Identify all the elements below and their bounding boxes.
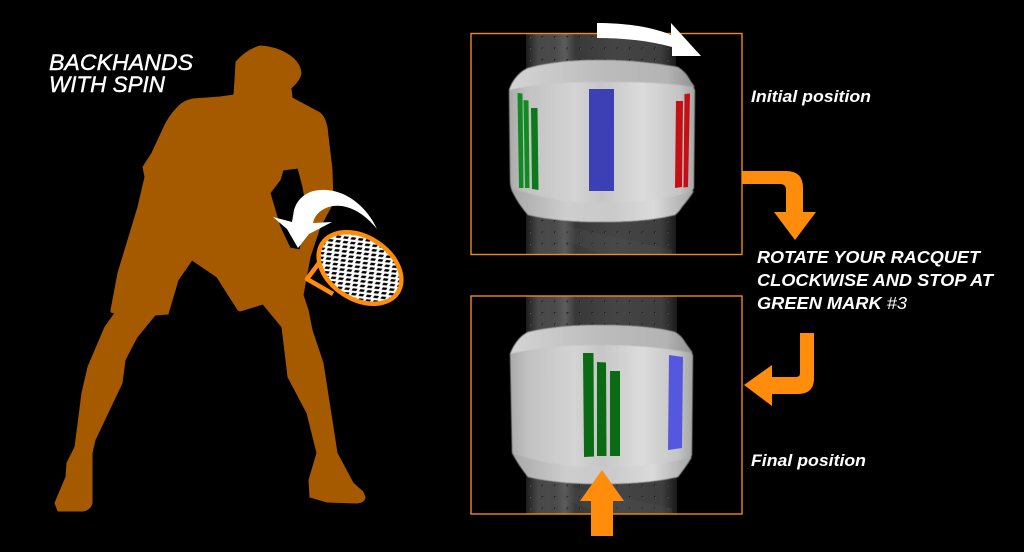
blue mark (589, 89, 614, 191)
title: BACKHANDS (49, 50, 193, 75)
panel: initial position (471, 33, 742, 255)
player silhouette (55, 46, 365, 511)
racquet grip (526, 33, 676, 255)
instruction text: CLOCKWISE AND STOP AT (757, 270, 994, 290)
instruction text: GREEN MARK #3 (757, 293, 907, 313)
arrow: to final position (744, 333, 814, 406)
green marks (583, 353, 620, 457)
grip collar (510, 325, 693, 484)
green marks (518, 93, 538, 190)
label: initial position: Initial position (751, 87, 871, 106)
arrow: up to marks (580, 470, 624, 536)
racquet (305, 217, 415, 319)
frame (471, 296, 742, 514)
arrow: to instruction (742, 171, 816, 240)
blue mark (668, 355, 683, 450)
frame (471, 34, 742, 254)
racquet grip (526, 296, 677, 514)
icon: white rotation arrow (597, 23, 701, 56)
title: WITH SPIN (49, 72, 165, 97)
label: final position: Final position (751, 451, 866, 470)
instruction text (757, 247, 994, 313)
icon: white swing arrow (273, 190, 377, 248)
instruction text: ROTATE YOUR RACQUET (757, 247, 981, 267)
grip collar (509, 60, 695, 222)
title (49, 50, 193, 97)
panel: final position (471, 296, 742, 514)
red marks (675, 94, 690, 188)
